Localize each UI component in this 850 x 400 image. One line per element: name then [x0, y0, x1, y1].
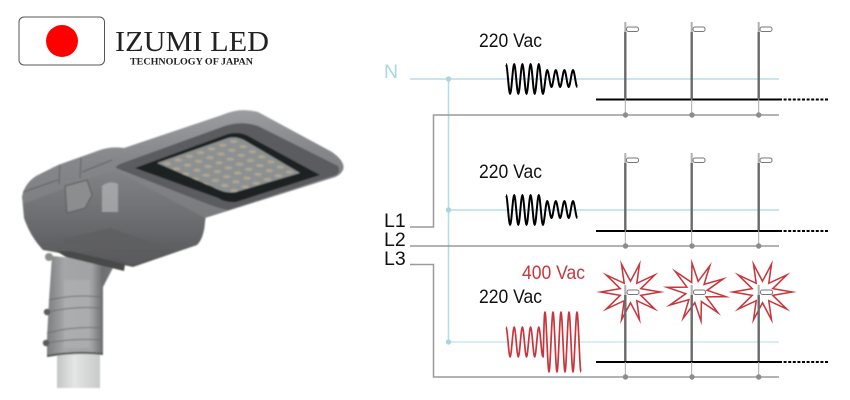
logo wordmark: IZUMI LED [115, 26, 269, 58]
waveform row 3: overvoltage [506, 312, 581, 372]
mounting bracket [43, 253, 116, 357]
product photo: LED street lamp [22, 110, 344, 388]
LED array [157, 137, 300, 192]
logo flag: Japan [19, 17, 104, 65]
top plate [22, 110, 344, 218]
label L1: L1 [384, 210, 406, 232]
wiring: phase lines [410, 115, 779, 377]
lamp burst 2 [663, 260, 730, 324]
street lights row 3 [623, 285, 772, 380]
voltage label row 3: 220 Vac [479, 286, 542, 308]
housing highlight [102, 182, 118, 212]
bezel [116, 123, 339, 210]
overvoltage label: 400 Vac [522, 262, 585, 284]
wiring: neutral line [410, 76, 779, 345]
label L3: L3 [384, 248, 406, 270]
street lights row 1 [623, 22, 772, 118]
mount plate [56, 251, 125, 271]
logo tagline: TECHNOLOGY OF JAPAN [130, 58, 253, 68]
black window [135, 133, 320, 202]
waveform row 1 [506, 64, 577, 94]
label L2: L2 [384, 229, 406, 251]
lamp burst 3 [733, 264, 792, 320]
pole tube [57, 352, 100, 388]
street lights row 2 [623, 153, 772, 249]
voltage label row 2: 220 Vac [479, 161, 542, 183]
wiring: lamp supply lines [596, 100, 828, 362]
voltage label row 1: 220 Vac [479, 30, 542, 52]
label N: N [384, 61, 398, 83]
housing underside panel [60, 228, 175, 264]
lamp burst 1 [601, 264, 660, 320]
hinge seams [23, 158, 112, 192]
logo: Izumi LED [19, 17, 269, 68]
latch [65, 180, 92, 213]
LED panel [157, 137, 300, 192]
waveform row 2 [506, 195, 577, 225]
lamp housing body [22, 160, 208, 267]
